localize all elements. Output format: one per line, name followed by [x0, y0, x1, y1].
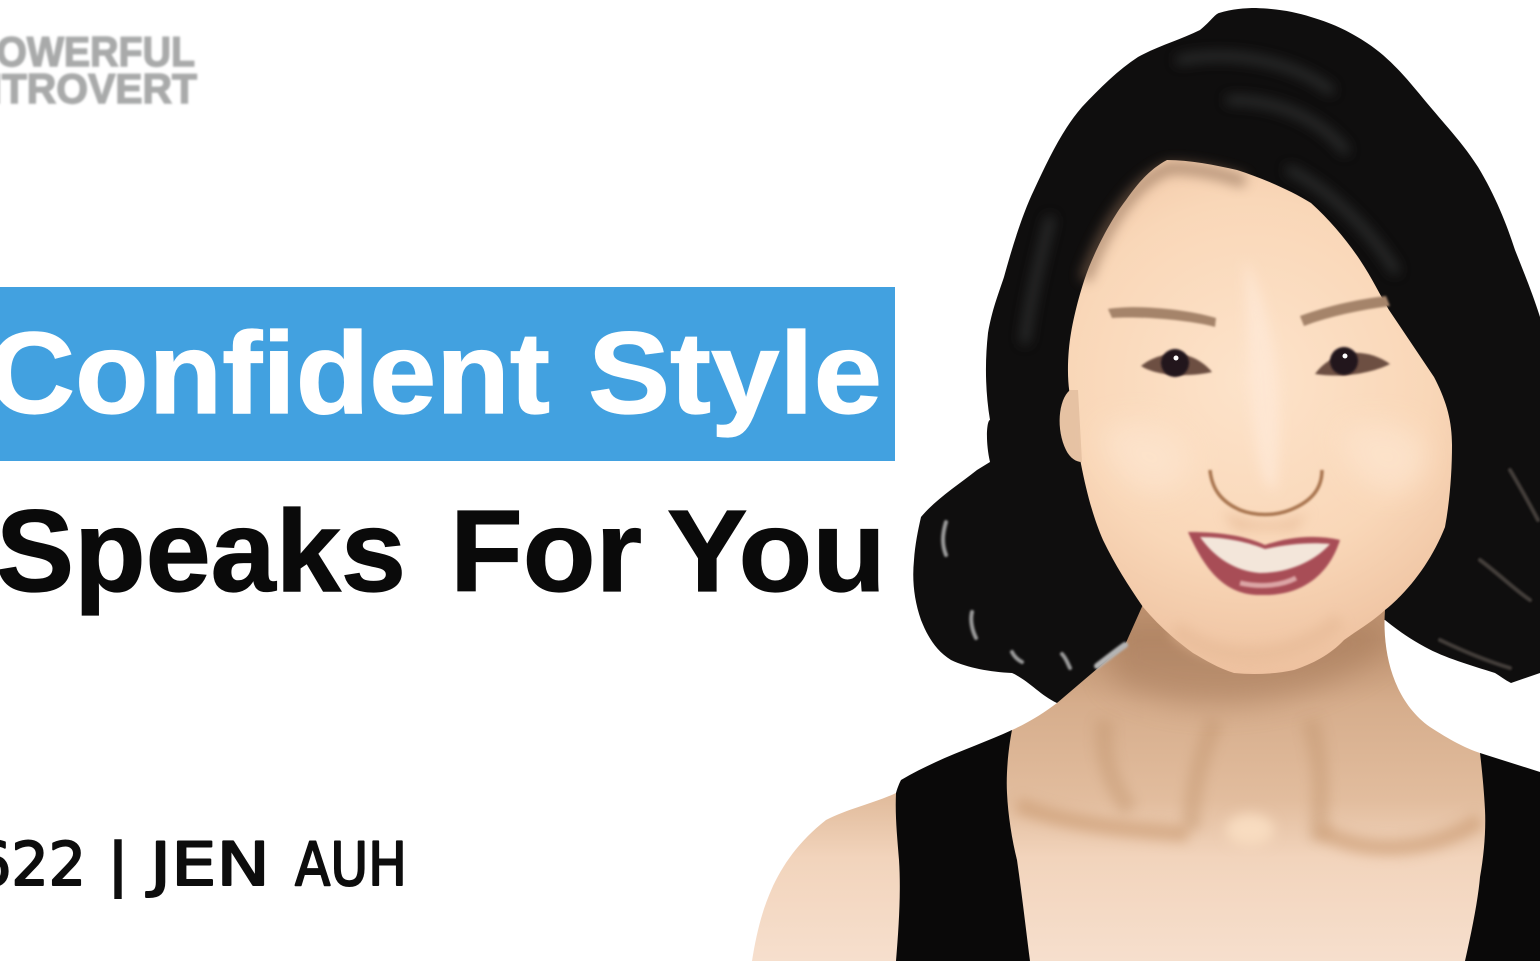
- subtitle: Speaks For You: For: [450, 486, 642, 616]
- title banner: Confident Style: Style: [588, 308, 882, 438]
- chin shading: [1175, 620, 1340, 655]
- ear: [1060, 390, 1082, 462]
- subtitle: Speaks For You: Speaks: [0, 486, 406, 616]
- right eye: [1315, 347, 1390, 376]
- neck tendons and collarbones: [1017, 620, 1480, 848]
- nose: [1210, 260, 1322, 530]
- cheek highlights: [1100, 422, 1426, 493]
- episode label: [0, 830, 407, 900]
- episode label: JEN: [145, 830, 270, 900]
- subtitle: Speaks For You: You: [667, 486, 886, 616]
- right brow: [1300, 296, 1390, 326]
- left eye: [1141, 349, 1212, 377]
- hairline shading: [1085, 168, 1245, 280]
- title banner: Confident Style: Confident: [0, 308, 550, 438]
- hair mass: [913, 8, 1540, 703]
- mouth: [1188, 532, 1340, 595]
- neck and chest: [752, 606, 1486, 961]
- black top: left strap: [896, 730, 1030, 961]
- portrait of Jen Auh: [700, 8, 1540, 961]
- episode label: AUH: [295, 830, 407, 900]
- face: [1068, 160, 1452, 674]
- title banner: Confident Style: [0, 287, 895, 461]
- black top: right strap: [1465, 753, 1540, 961]
- subtitle: Speaks For You: [0, 486, 886, 616]
- hair highlights: [943, 56, 1538, 668]
- left brow: [1108, 307, 1216, 327]
- logo: Powerful Introvert: [0, 28, 197, 112]
- episode label: |: [103, 830, 133, 900]
